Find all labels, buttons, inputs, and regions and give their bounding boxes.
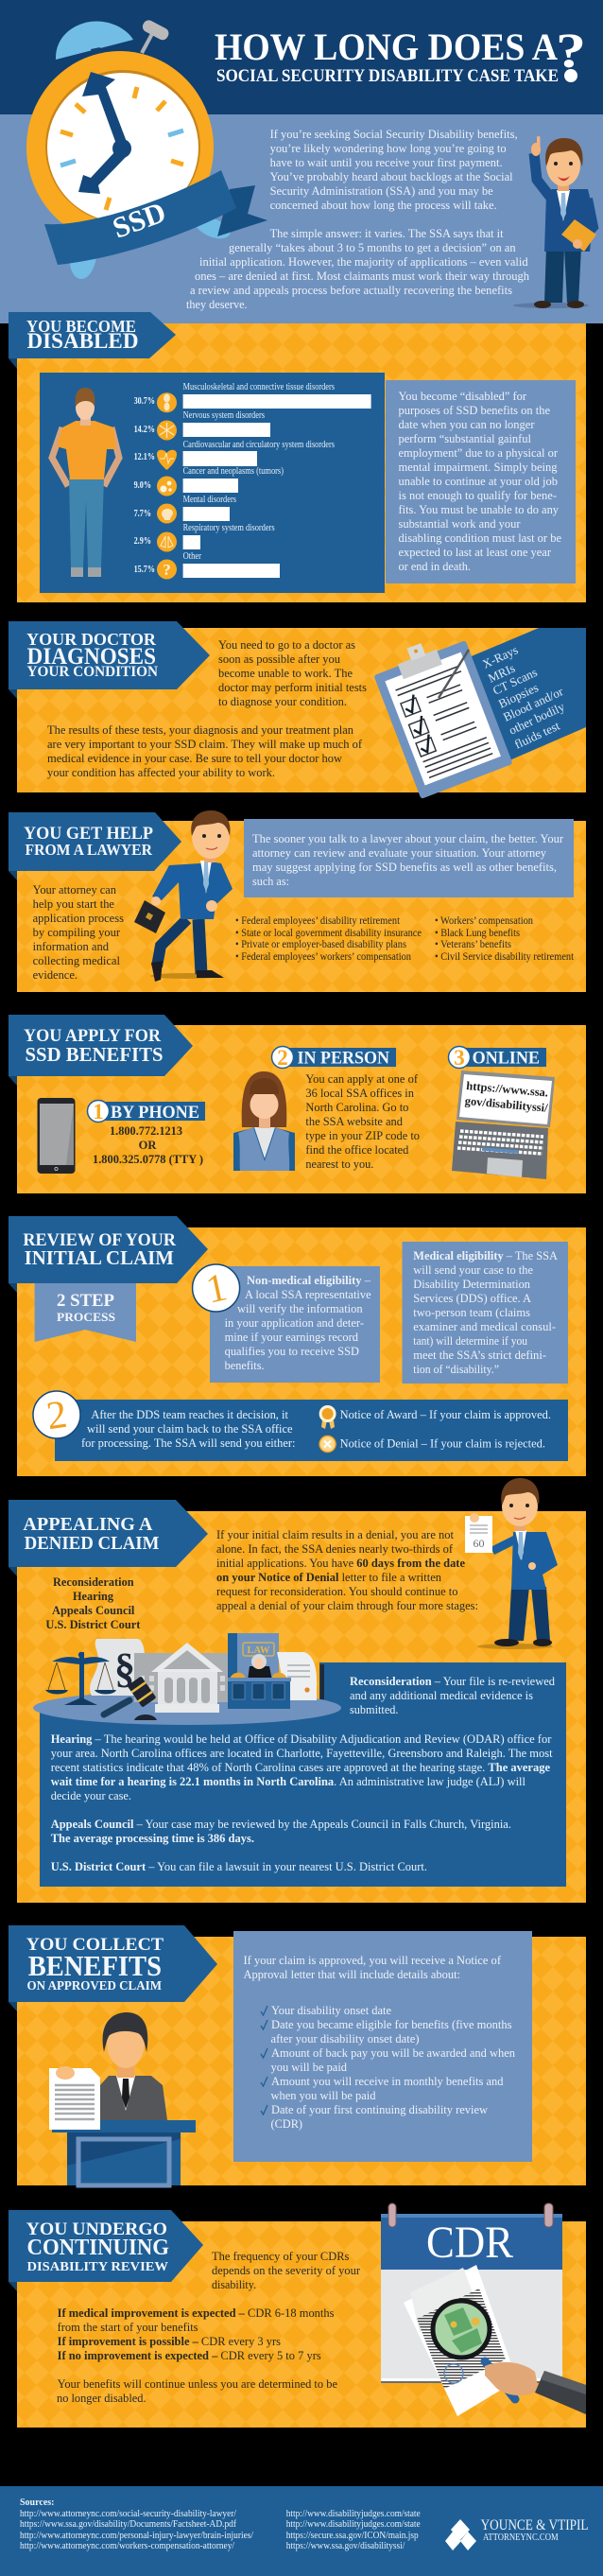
- blue stripe: medical test list: MRIs: [486, 661, 517, 686]
- step 1b: medical eligibility: tion of “disability.”: [413, 1363, 499, 1376]
- law book: [228, 1633, 279, 1680]
- option 2: in person: nearest to you.: [305, 1157, 373, 1171]
- blue stripe: medical test list: CT Scans: [491, 665, 540, 698]
- text: reconsideration: submitted.: [350, 1703, 399, 1716]
- banner: you collect: BENEFITS: [28, 1949, 162, 1982]
- icon: businessman pointing up with folder: [513, 136, 596, 308]
- step 2: notice bar: Notice of Award – If your claim is approved.: [340, 1408, 551, 1421]
- icon: clipboard with checklist: [369, 628, 513, 799]
- text: attorney help: [33, 883, 124, 982]
- sources: https://secure.ssa.gov/ICON/main.jsp: [286, 2531, 419, 2541]
- text: CDR schedule: from the start of your benefits: [58, 2321, 198, 2334]
- text: test results: [47, 723, 363, 779]
- bars and labels: Nervous system disorders: [183, 410, 265, 421]
- text: CDR schedule: If no improvement is expected – CDR every 5 to 7 yrs: [58, 2349, 321, 2362]
- section sign: §: [114, 1645, 135, 1692]
- banner: you undergo: YOU UNDERGO: [26, 2220, 167, 2239]
- callout: notice of approval: If your claim is approved, you will receive a Notice of: [244, 1954, 502, 1967]
- sources: https://www.ssa.gov/disabilityssi/: [286, 2541, 405, 2551]
- banner: you get help: FROM A LAWYER: [25, 841, 153, 859]
- scales of justice: [45, 1652, 116, 1705]
- intro text: The simple answer: it varies. The SSA says that it: [270, 227, 504, 240]
- list: appeal stages: Reconsideration: [53, 1575, 134, 1589]
- icon: laptop with url: [452, 1070, 555, 1179]
- icon row: percentages: 12.1%: [134, 452, 155, 462]
- intro text: have to wait until you receive your first payment.: [270, 156, 503, 169]
- illustration: legal scene: [33, 1633, 341, 1725]
- callout: definition of disabled: mental impairment. Simply being: [399, 461, 558, 474]
- icon row: percentages: 15.7%: [134, 565, 155, 575]
- title: [215, 25, 586, 86]
- text: appeals council: Appeals Council – Your case may be reviewed by the Appeals Council in Falls Church, Virginia.: [51, 1818, 511, 1831]
- callout: definition of disabled: date when you can no longer: [399, 418, 535, 431]
- text block box: appeal stages: [40, 1662, 566, 1887]
- step 1b: medical eligibility: examiner and medical consul-: [413, 1320, 556, 1333]
- callout: definition of disabled: employment” due to a physical or: [399, 446, 559, 460]
- option 2: in person: [272, 1046, 420, 1171]
- text: attorney help: application process: [33, 912, 124, 925]
- banner: review of your initial claim: REVIEW OF YOUR: [23, 1230, 176, 1250]
- panel: you apply for ssd benefits: [9, 1015, 586, 1193]
- banner: you collect: YOU COLLECT: [26, 1935, 164, 1955]
- figure: standing person: [52, 388, 119, 577]
- text: attorney help: information and: [33, 940, 110, 953]
- text: test results: medical evidence in your case. Be sure to tell your doctor how: [47, 752, 342, 765]
- title: SOCIAL SECURITY DISABILITY CASE TAKE: [216, 66, 559, 86]
- intro text: concerned about how long the process will take.: [270, 199, 497, 212]
- banner: you get help: [9, 812, 181, 880]
- icon: alarm clock with SSD ribbon: [26, 18, 267, 279]
- text: appeals council: The average processing time is 386 days.: [51, 1832, 254, 1845]
- step 1: non-medical eligibility: in your application and deter-: [225, 1316, 364, 1330]
- text: denial intro: If your initial claim results in a denial, you are not: [216, 1528, 455, 1541]
- intro text: a review and appeals process before actually recovering the benefits: [190, 284, 512, 297]
- scroll: [90, 1639, 145, 1696]
- step 1b: medical eligibility: Medical eligibility – The SSA: [413, 1249, 558, 1262]
- icons: disorder types: ?: [163, 561, 171, 579]
- sources: http://www.attorneync.com/social-security-disability-lawyer/: [20, 2509, 236, 2519]
- list: appeal stages: [45, 1575, 141, 1631]
- banner: review of your initial claim: INITIAL CLAIM: [25, 1246, 174, 1269]
- intro text: they deserve.: [186, 298, 248, 311]
- list: other benefits right: • Black Lung benefits: [435, 928, 520, 939]
- callout: talk to a lawyer: such as:: [252, 875, 289, 888]
- callout: talk to a lawyer: attorney can review and evaluate your situation. Your attorney: [252, 846, 547, 860]
- list: other benefits left: • Federal employees’ disability retirement: [235, 915, 401, 927]
- icon: businessman holding 60-day notice: 60: [473, 1537, 484, 1550]
- step 1b: medical eligibility: will send your case to the: [413, 1263, 533, 1277]
- text: CDR schedule: Your benefits will continue unless you are determined to be: [58, 2377, 337, 2391]
- logo: [445, 2517, 588, 2550]
- title: ?: [556, 25, 586, 78]
- text: CDR schedule: If improvement is possible – CDR every 3 yrs: [58, 2335, 281, 2348]
- icon: running lawyer with briefcase: [134, 810, 233, 982]
- callout: notice of approval: Approval letter that will include details about:: [244, 1968, 460, 1981]
- sources: https://www.ssa.gov/disability/Documents/Factsheet-AD.pdf: [20, 2519, 237, 2530]
- callout: definition of disabled: You become “disabled” for: [399, 390, 527, 403]
- callout: definition of disabled: fits. You must be unable to do any: [399, 503, 560, 516]
- checklist: Date you became eligible for benefits (five months: [271, 2018, 512, 2031]
- bars and labels: Mental disorders: [183, 495, 236, 505]
- icon row: percentages: 9.0%: [134, 480, 151, 491]
- option 1: by phone: 1.800.772.1213: [110, 1124, 182, 1138]
- option 1: by phone: 1.800.325.0778 (TTY ): [93, 1153, 203, 1166]
- text: see a doctor: soon as possible after you: [218, 653, 341, 666]
- list: other benefits right: [435, 915, 575, 963]
- option 2: in person: the SSA website and: [305, 1115, 404, 1128]
- text: see a doctor: doctor may perform initial tests: [218, 681, 367, 694]
- icon row: percentages: 14.2%: [134, 425, 155, 435]
- text: see a doctor: [218, 638, 367, 708]
- icon: smartphone: [38, 1098, 76, 1174]
- callout: definition of disabled: perform “substantial gainful: [399, 432, 532, 445]
- callout: definition of disabled: disabling condition must last or be: [399, 531, 561, 545]
- text: frequency of CDRs: depends on the severity of your: [212, 2264, 361, 2277]
- icon: CDR calendar with magnifier: CDR: [426, 2218, 513, 2268]
- step 2: notice bar: After the DDS team reaches it decision, it: [91, 1408, 289, 1421]
- option 2: in person: North Carolina. Go to: [305, 1101, 408, 1114]
- list: appeal stages: Hearing: [73, 1590, 114, 1603]
- callout: definition of disabled: purposes of SSD benefits on the: [399, 404, 550, 417]
- banner: you undergo: [9, 2210, 203, 2291]
- option 1: by phone: BY PHONE: [111, 1103, 199, 1123]
- checklist: Amount of back pay you will be awarded and when: [271, 2046, 516, 2060]
- intro text: generally “takes about 3 to 5 months to get a decision” on an: [229, 241, 516, 254]
- icon row: percentages: 7.7%: [134, 509, 151, 519]
- banner: your doctor: YOUR DOCTOR: [26, 630, 157, 649]
- text: hearing: [51, 1732, 553, 1802]
- banner: you get help: YOU GET HELP: [24, 824, 153, 844]
- blue stripe: medical test list: other bodily: [507, 699, 567, 738]
- option 3: online: 3: [454, 1046, 465, 1070]
- bars and labels: [183, 382, 371, 578]
- banner: you collect: ON APPROVED CLAIM: [26, 1979, 162, 1993]
- intro text: initial application. However, the majority of applications – even valid: [199, 255, 528, 269]
- sources: http://www.disabilityjudges.com/state: [286, 2519, 421, 2530]
- step 1b: medical eligibility: Disability Determination: [413, 1278, 531, 1291]
- blue stripe: medical test list: Biopsies: [496, 680, 541, 711]
- title: HOW LONG DOES A: [215, 26, 558, 68]
- icon: denial circle: [319, 1436, 336, 1453]
- text: district court: U.S. District Court – You can file a lawsuit in your nearest U.S. District Court.: [51, 1860, 427, 1873]
- icon: award badge: [319, 1405, 336, 1429]
- checklist: Date of your first continuing disability review: [271, 2103, 488, 2116]
- callout: talk to a lawyer: The sooner you talk to a lawyer about your claim, the better. Your: [252, 832, 564, 845]
- banner: you undergo: CONTINUING: [26, 2236, 169, 2260]
- text: attorney help: Your attorney can: [33, 883, 117, 896]
- text: CDR schedule: If medical improvement is expected – CDR 6-18 months: [58, 2306, 335, 2320]
- banner: you undergo: DISABILITY REVIEW: [26, 2260, 168, 2274]
- text: hearing: recent statistics indicate that 48% of North Carolina cases are approved at the hearing stage. The average: [51, 1761, 550, 1774]
- blue stripe: medical test list: X-Rays: [480, 642, 520, 671]
- checklist: (CDR): [270, 2117, 302, 2131]
- checklist: Your disability onset date: [271, 2004, 391, 2017]
- step 1: non-medical eligibility: 1: [202, 1265, 231, 1313]
- banner: you apply: SSD BENEFITS: [25, 1043, 164, 1066]
- text: frequency of CDRs: [212, 2250, 361, 2291]
- panel: continuing disability review: [9, 2203, 586, 2428]
- intro text: If you’re seeking Social Security Disability benefits,: [270, 128, 518, 141]
- text: denial intro: alone. In fact, the SSA denies nearly two-thirds of: [216, 1542, 454, 1556]
- list: appeal stages: Appeals Council: [52, 1604, 135, 1617]
- blue stripe: medical test list: fluids test: [512, 718, 562, 752]
- checklist: when you will be paid: [270, 2089, 376, 2102]
- text: hearing: your area. North Carolina offices are located in Charlotte, Fayetteville, Greensboro and Raleigh. The most: [51, 1747, 553, 1760]
- checklist: you will be paid: [270, 2061, 348, 2074]
- option 1: by phone: [87, 1100, 205, 1166]
- text: hearing: decide your case.: [51, 1789, 131, 1802]
- bar chart: disability types: [40, 373, 385, 593]
- callout: notice of approval: [233, 1931, 532, 2162]
- text: attorney help: collecting medical: [33, 954, 121, 967]
- sources: [20, 2498, 421, 2551]
- banner: review of your initial claim: [9, 1216, 208, 1293]
- list: other benefits left: • Federal employees’ workers’ compensation: [235, 951, 411, 963]
- pen: [319, 1664, 324, 1699]
- gavel: [104, 1676, 157, 1720]
- option 2: in person: IN PERSON: [297, 1048, 389, 1069]
- sources: http://www.attorneync.com/personal-injury-lawyer/brain-injuries/: [20, 2531, 253, 2541]
- intro text: ones – are denied at first. Most claimants must work their way through: [195, 270, 530, 283]
- banner: appealing: APPEALING A: [23, 1514, 153, 1535]
- icon: woman at SSA office: [233, 1071, 295, 1171]
- text: see a doctor: to diagnose your condition.: [218, 695, 347, 708]
- text: CDR schedule: no longer disabled.: [57, 2392, 146, 2405]
- text: frequency of CDRs: disability.: [212, 2278, 256, 2291]
- option 2: in person: find the office located: [305, 1143, 409, 1157]
- text: denial intro: [216, 1528, 478, 1612]
- banner: you become disabled: YOU BECOME: [26, 317, 136, 336]
- intro background: [0, 114, 603, 323]
- step 1b: medical eligibility: two-person team (claims: [413, 1306, 530, 1319]
- panel: you collect benefits: [9, 1925, 586, 2185]
- intro text: Security Administration (SSA) and you may be: [270, 184, 493, 198]
- list: other benefits left: • Private or employer-based disability plans: [235, 939, 406, 950]
- step 1: non-medical eligibility: mine if your earnings record: [225, 1331, 359, 1344]
- step 1b: medical eligibility: Services (DDS) office. A: [413, 1292, 531, 1305]
- step 1: non-medical eligibility: qualifies you to receive SSD: [225, 1345, 359, 1358]
- list: other benefits left: • State or local government disability insurance: [235, 928, 422, 939]
- panel: you become disabled: [9, 312, 586, 602]
- text: denial intro: on your Notice of Denial letter to file a written: [216, 1571, 442, 1584]
- text: hearing: Hearing – The hearing would be held at Office of Disability Adjudication and Review (ODAR) office for: [51, 1732, 552, 1746]
- courthouse: [151, 1643, 223, 1713]
- bars and labels: Cancer and neoplasms (tumors): [183, 466, 284, 477]
- blue stripe: medical test list: [467, 628, 586, 764]
- option 2: in person: You can apply at one of: [305, 1072, 419, 1086]
- panel: appealing a denied claim: [9, 1478, 586, 1903]
- callout: definition of disabled: unable to continue at your old job: [399, 475, 558, 488]
- bars and labels: Other: [183, 551, 202, 562]
- list: other benefits right: • Workers’ compensation: [435, 915, 533, 927]
- option 1: by phone: 1: [93, 1100, 104, 1123]
- step 1: non-medical eligibility: will verify the information: [237, 1302, 363, 1315]
- callout: definition of disabled: substantial work and your: [399, 517, 521, 531]
- step 2: notice bar: 2: [44, 1393, 70, 1438]
- list: other benefits left: [235, 915, 422, 963]
- text: appeals council: [51, 1818, 511, 1845]
- text: attorney help: by compiling your: [33, 926, 121, 939]
- list: other benefits right: • Veterans’ benefits: [435, 939, 511, 950]
- banner: appealing: [9, 1500, 208, 1576]
- text: attorney help: evidence.: [33, 968, 78, 982]
- blue stripe: medical test list: Blood and/or: [501, 684, 566, 724]
- header band: [0, 0, 603, 114]
- right scroll: [277, 1652, 317, 1700]
- checklist: Amount you will receive in monthly benefits and: [271, 2075, 504, 2088]
- checklist: [261, 2004, 516, 2131]
- icons: disorder types: [157, 392, 177, 579]
- panel: your doctor diagnoses your condition: [9, 621, 586, 799]
- text: test results: The results of these tests, your diagnosis and your treatment plan: [47, 723, 354, 737]
- law book: LAW: [248, 1645, 270, 1656]
- icon row: percentages: 30.7%: [134, 396, 155, 407]
- text: denial intro: request for reconsideration. You should continue to: [216, 1585, 457, 1598]
- sources: Sources:: [20, 2498, 54, 2508]
- step 1: non-medical eligibility: A local SSA representative: [245, 1288, 371, 1301]
- banner: you apply: [9, 1015, 193, 1086]
- step 1: non-medical eligibility: benefits.: [225, 1359, 265, 1372]
- icon: alarm clock with SSD ribbon: SSD: [108, 195, 170, 245]
- intro text: [186, 128, 530, 311]
- icon: laptop with url: https://www.ssa.: [466, 1079, 549, 1100]
- checklist: after your disability onset date): [270, 2032, 420, 2045]
- text: see a doctor: become unable to work. The: [218, 667, 353, 680]
- icon row: percentages: 2.9%: [134, 536, 151, 547]
- bars and labels: Cardiovascular and circulatory system disorders: [183, 440, 335, 450]
- bars and labels: Musculoskeletal and connective tissue disorders: [183, 382, 335, 392]
- text: attorney help: help you start the: [33, 897, 114, 911]
- step 1b: medical eligibility: tant) will determine if you: [413, 1334, 528, 1348]
- step 1: non-medical eligibility: [193, 1264, 380, 1383]
- banner: you become disabled: [9, 312, 176, 369]
- text: reconsideration: and any additional medical evidence is: [350, 1689, 533, 1702]
- step 2: notice bar: for processing. The SSA will send you either:: [81, 1436, 295, 1450]
- sources: http://www.attorneync.com/workers-compensation-attorney/: [20, 2541, 234, 2551]
- bench: [228, 1678, 291, 1709]
- callout: definition of disabled: is not enough to qualify for bene-: [399, 489, 557, 502]
- text: denial intro: initial applications. You have 60 days from the date: [216, 1557, 465, 1570]
- banner: your doctor: DIAGNOSES: [26, 644, 156, 670]
- banner: your doctor: [9, 621, 210, 699]
- icon: laptop with url: gov/disabilityssi/: [464, 1094, 549, 1115]
- step 1b: medical eligibility: [403, 1242, 568, 1384]
- list: other benefits right: • Civil Service disability retirement: [435, 951, 575, 963]
- icon: businessman holding 60-day notice: [465, 1478, 558, 1649]
- ribbon: 2 step process: [35, 1281, 136, 1342]
- banner: you collect: [9, 1925, 217, 2011]
- banner: you apply: YOU APPLY FOR: [24, 1026, 161, 1046]
- callout: talk to a lawyer: may suggest applying for SSD benefits as well as other benefits,: [252, 861, 557, 874]
- ribbon: 2 step process: PROCESS: [57, 1310, 115, 1324]
- callout: definition of disabled: expected to last at least one year: [399, 546, 552, 559]
- text: denial intro: appeal a denial of your claim through four more stages:: [216, 1599, 478, 1612]
- text: reconsideration: [350, 1675, 556, 1716]
- text: CDR schedule: [57, 2306, 337, 2405]
- option 3: online: [448, 1046, 546, 1070]
- banner: you become disabled: DISABLED: [26, 329, 138, 353]
- step 2: notice bar: will send your claim back to the SSA office: [87, 1422, 293, 1436]
- icon: man at podium with letter: [49, 2012, 196, 2185]
- step 2: notice bar: [33, 1391, 568, 1461]
- ribbon: 2 step process: 2 STEP: [57, 1291, 114, 1311]
- intro text: you’re likely wondering how long you’re going to: [270, 142, 507, 155]
- callout: talk to a lawyer: [244, 819, 574, 897]
- icon: CDR calendar with magnifier: [381, 2203, 586, 2416]
- text: hearing: wait time for a hearing is 22.1 months in North Carolina. An administrative law judge (ALJ) will: [51, 1775, 526, 1788]
- step 2: notice bar: Notice of Denial – If your claim is rejected.: [340, 1437, 545, 1451]
- sources: http://www.disabilityjudges.com/state: [286, 2509, 421, 2519]
- footer: [0, 2486, 603, 2576]
- text: test results: are very important to your SSD claim. They will make up much of: [47, 738, 363, 751]
- step 1b: medical eligibility: meet the SSA’s strict defini-: [413, 1349, 546, 1362]
- callout: definition of disabled: [386, 380, 576, 583]
- intro text: You’ve probably heard about backlogs at the Social: [270, 170, 513, 183]
- panel: you get help from a lawyer: [9, 810, 586, 992]
- option 2: in person: type in your ZIP code to: [305, 1129, 420, 1142]
- option 2: in person: 2: [277, 1046, 288, 1070]
- option 1: by phone: OR: [139, 1139, 157, 1152]
- text: test results: your condition has affected your ability to work.: [47, 766, 275, 779]
- text: see a doctor: You need to go to a doctor as: [218, 638, 355, 652]
- list: appeal stages: U.S. District Court: [45, 1618, 141, 1631]
- banner: appealing: DENIED CLAIM: [25, 1533, 160, 1554]
- banner: your doctor: YOUR CONDITION: [26, 664, 158, 680]
- bars and labels: Respiratory system disorders: [183, 523, 275, 533]
- judge: [230, 1654, 287, 1680]
- option 3: online: ONLINE: [473, 1048, 540, 1069]
- panel: review of your initial claim: [9, 1216, 586, 1476]
- text: reconsideration: Reconsideration – Your file is re-reviewed: [350, 1675, 556, 1688]
- step 1: non-medical eligibility: Non-medical eligibility –: [247, 1274, 371, 1287]
- logo: ATTORNEYNC.COM: [483, 2532, 559, 2543]
- icon row: percentages: [134, 396, 155, 575]
- callout: definition of disabled: or end in death.: [399, 560, 471, 573]
- court wings: [134, 1653, 239, 1702]
- option 2: in person: 36 local SSA offices in: [305, 1087, 415, 1100]
- text: frequency of CDRs: The frequency of your CDRs: [212, 2250, 350, 2263]
